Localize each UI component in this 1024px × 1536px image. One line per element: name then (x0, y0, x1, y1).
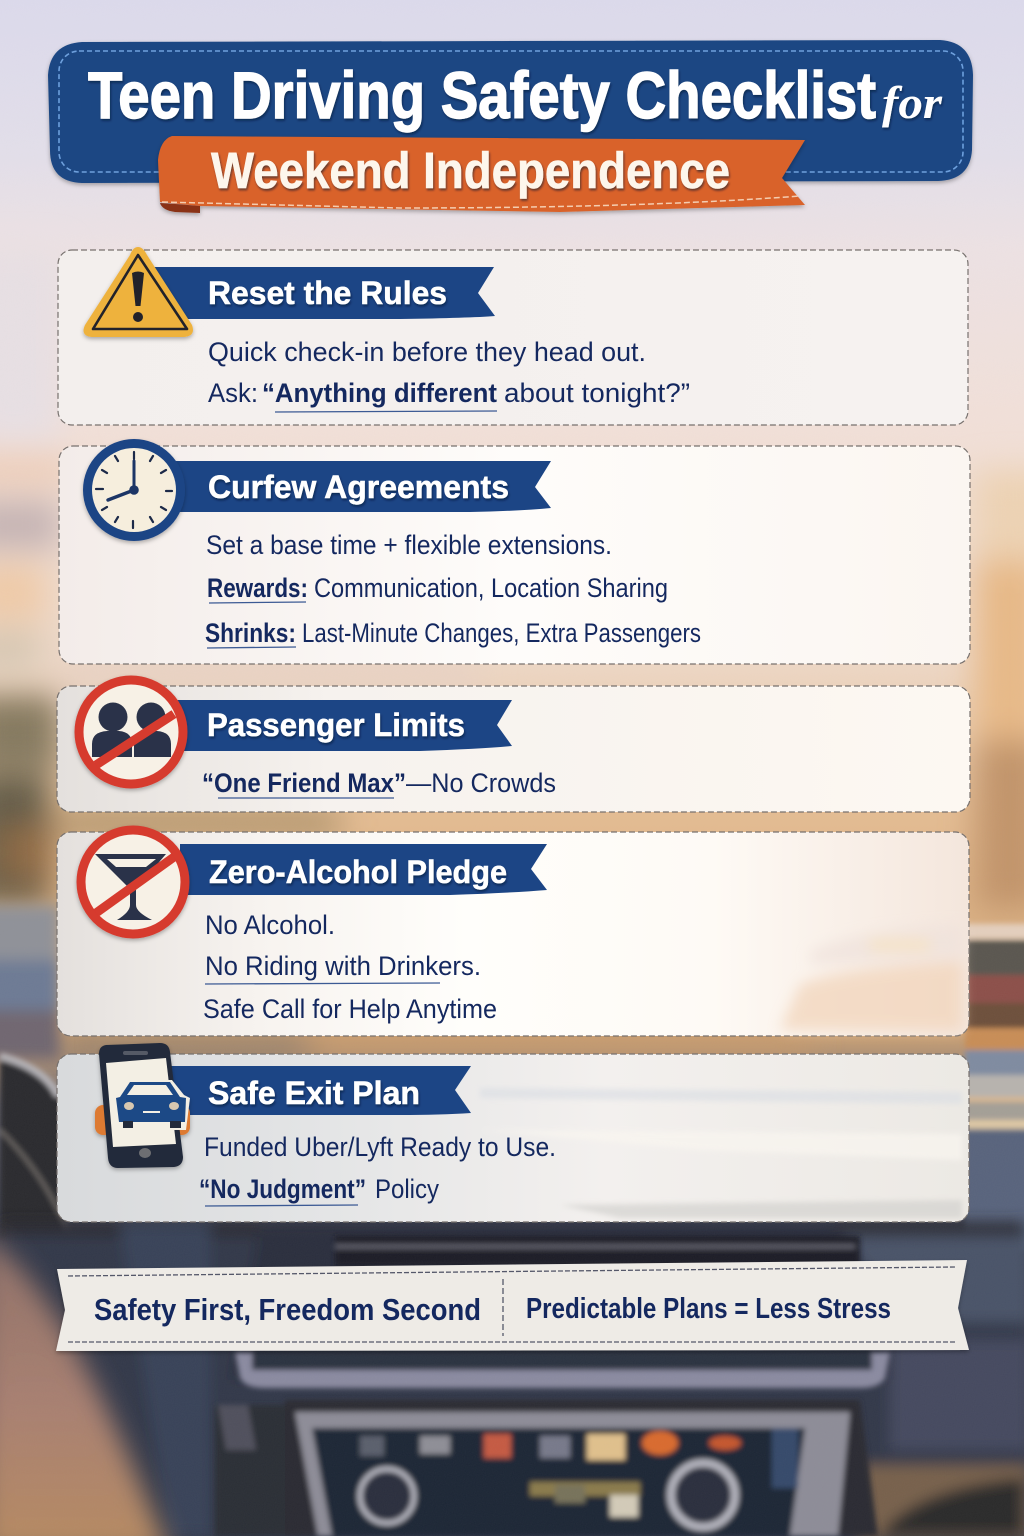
bold quote: “One Friend Max” (202, 768, 406, 798)
bold quote: “No Judgment” (199, 1174, 366, 1204)
script word: for: for (882, 77, 943, 128)
heading: Passenger Limits (207, 707, 465, 743)
heading: Safe Exit Plan (208, 1075, 420, 1111)
orange ribbon (158, 136, 805, 213)
lower dashboard (0, 1222, 1024, 1536)
panel: Safe Exit Plan (57, 1043, 969, 1222)
title banner (48, 40, 973, 213)
shrinks text: Last-Minute Changes, Extra Passengers (302, 618, 701, 648)
icon: warning triangle (84, 247, 193, 337)
body line 3: Safe Call for Help Anytime (203, 994, 497, 1024)
emphasis: “Anything different (262, 378, 497, 408)
icon: no passengers (79, 680, 183, 784)
ask line: Ask: (208, 378, 258, 408)
soft road glow through panel (780, 925, 962, 1030)
icon: phone with car (95, 1043, 190, 1168)
icon: clock (83, 439, 185, 541)
heading ribbon (150, 267, 495, 319)
ask line end: about tonight?” (504, 378, 690, 408)
body line 2: No Riding with Drinkers. (205, 951, 481, 981)
body text: Set a base time + flexible extensions. (206, 530, 612, 560)
ribbon text: Weekend Independence (211, 142, 730, 199)
heading ribbon (175, 700, 512, 751)
body text: Quick check-in before they head out. (208, 337, 646, 367)
body line 1: Funded Uber/Lyft Ready to Use. (204, 1132, 556, 1162)
heading: Zero-Alcohol Pledge (209, 854, 507, 890)
heading ribbon (170, 461, 551, 512)
panel: Reset the Rules (58, 247, 968, 425)
road streaks in panel (480, 1088, 962, 1218)
icon: no alcohol (81, 830, 185, 934)
navy title plate (48, 40, 973, 183)
body line 2: Policy (375, 1174, 439, 1204)
panel: Zero-Alcohol Pledge (57, 830, 969, 1036)
heading ribbon (170, 1066, 471, 1115)
body line 1: No Alcohol. (205, 910, 335, 940)
heading: Curfew Agreements (208, 469, 509, 505)
body text: —No Crowds (406, 768, 556, 798)
heading: Reset the Rules (208, 275, 447, 311)
footer banner (56, 1260, 969, 1351)
footer left text: Safety First, Freedom Second (94, 1292, 481, 1327)
rewards label: Rewards: (207, 573, 308, 603)
shrinks label: Shrinks: (205, 618, 296, 648)
footer right text: Predictable Plans = Less Stress (526, 1293, 891, 1325)
panel: Curfew Agreements (59, 439, 970, 664)
rewards text: Communication, Location Sharing (314, 573, 668, 603)
title text: Teen Driving Safety Checklist (88, 58, 876, 132)
heading ribbon (180, 844, 547, 895)
panel: Passenger Limits (57, 680, 970, 812)
